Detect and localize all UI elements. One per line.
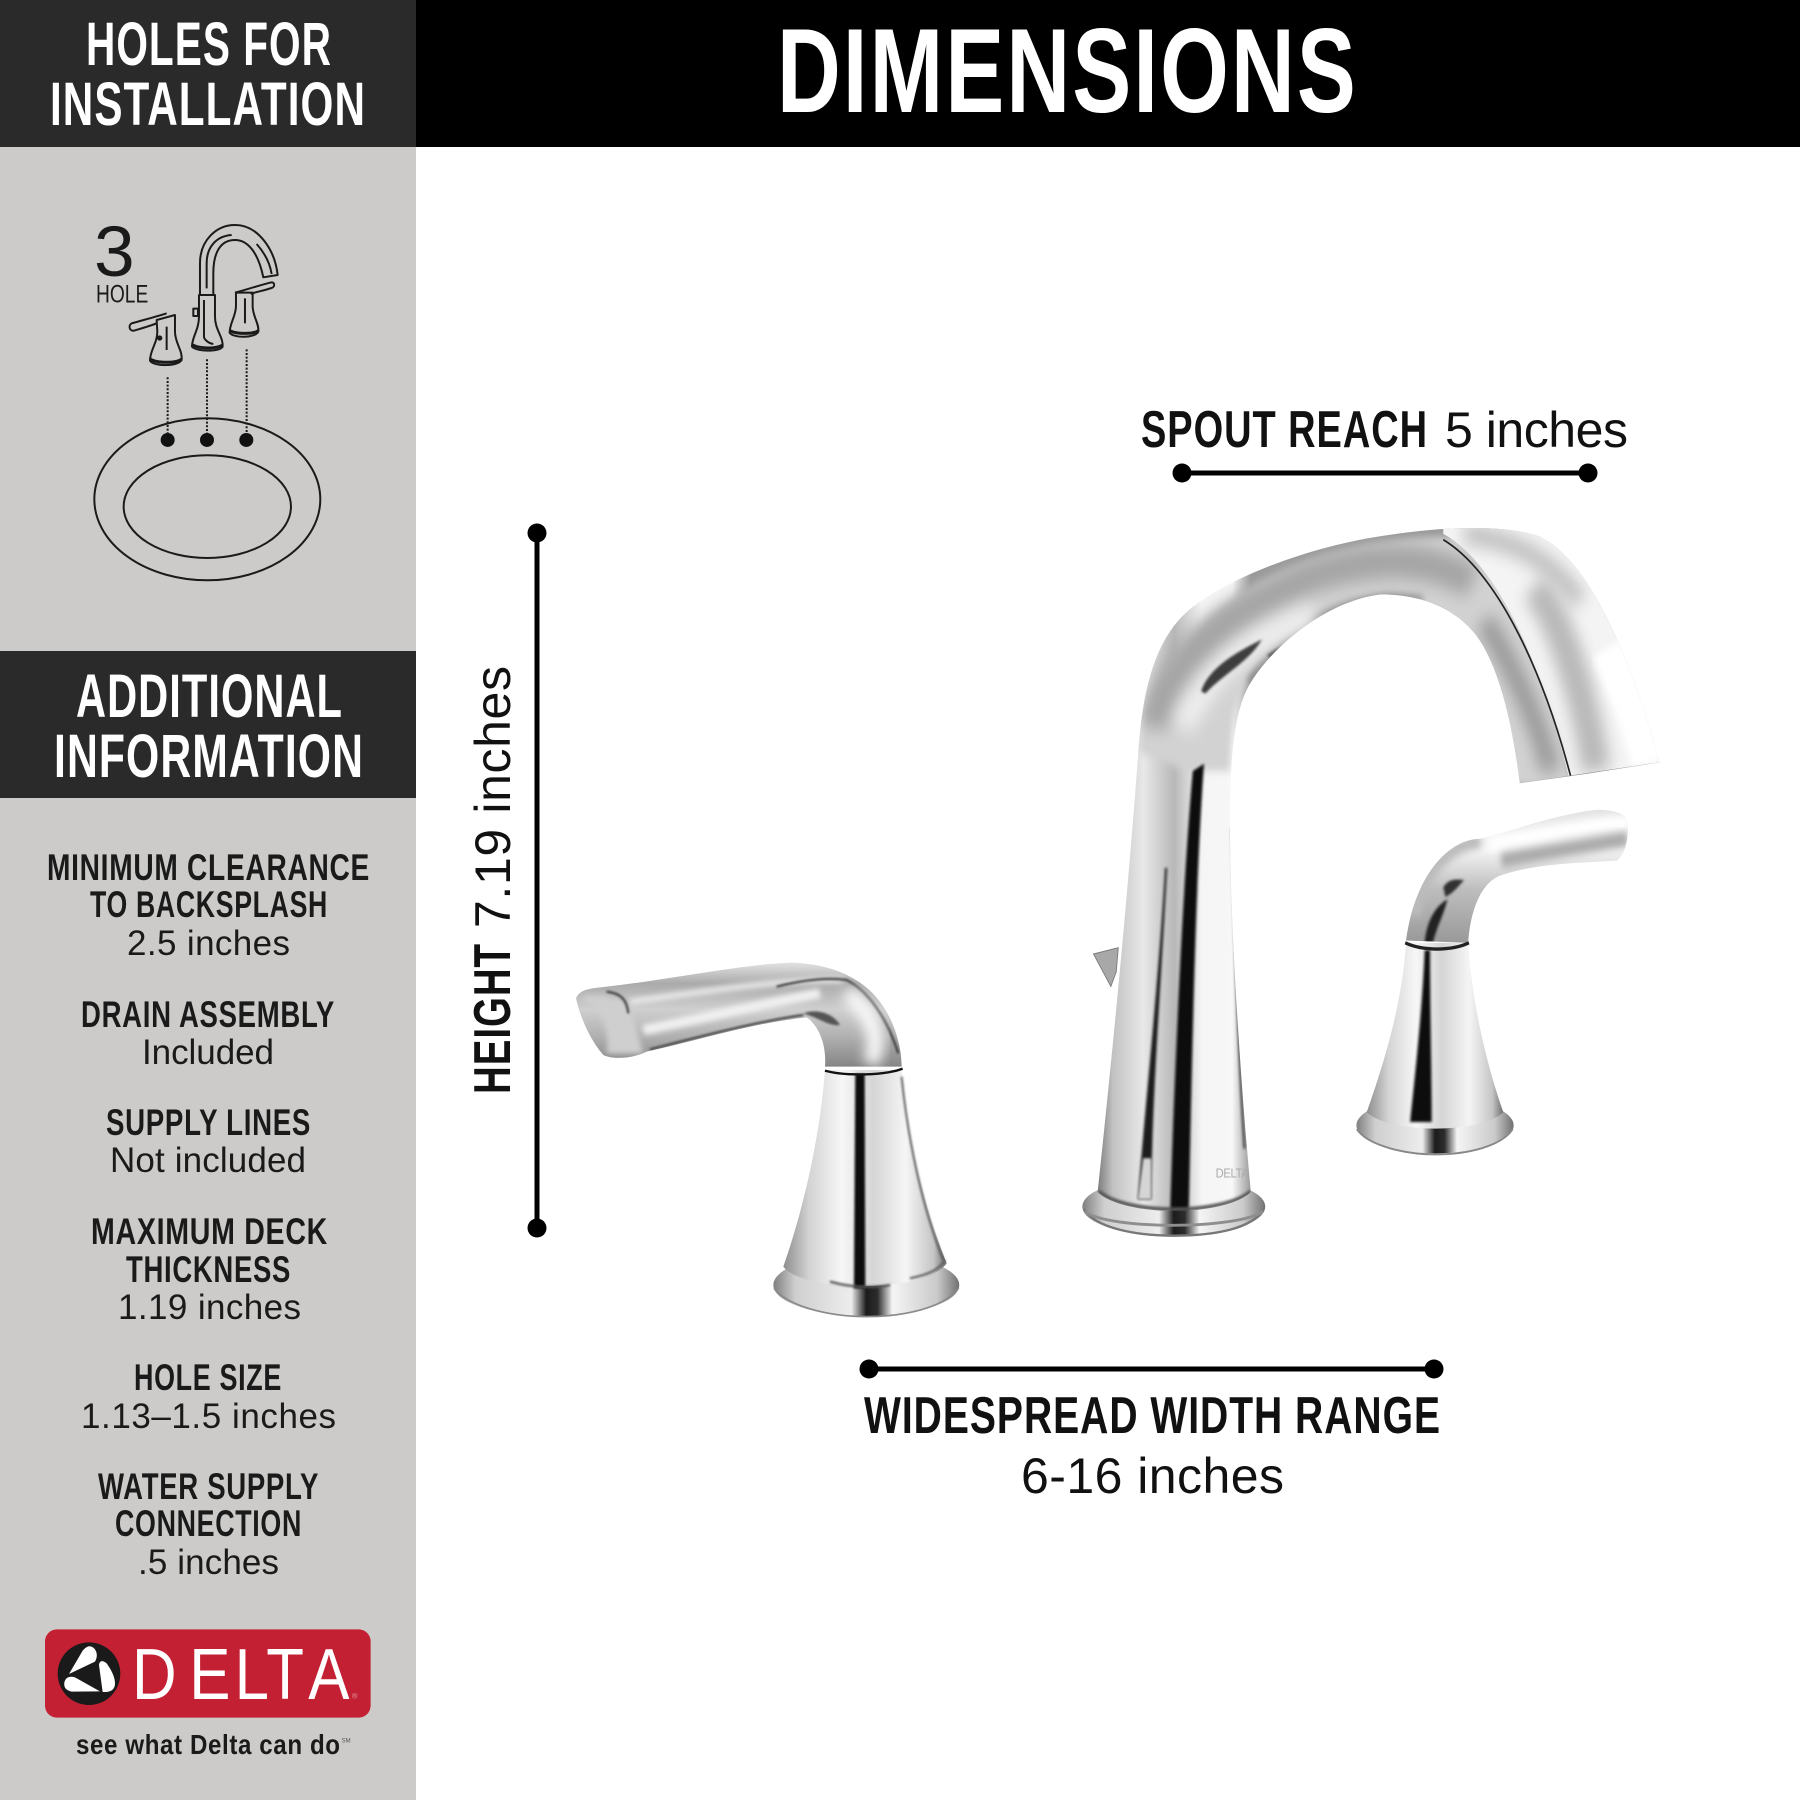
logo wordmark: DELTA [132, 1634, 349, 1715]
spout base flange [1082, 1177, 1265, 1237]
title: dimensions: DIMENSIONS [777, 4, 1358, 138]
service mark: SM [342, 1739, 351, 1745]
spec: supply lines: Not included [110, 1141, 306, 1180]
pop-up drain knob [1093, 948, 1118, 986]
dimension: height: 7.19 inches [465, 666, 521, 928]
spec: supply lines [106, 1102, 311, 1180]
heading: holes for installation: INSTALLATION [50, 70, 366, 138]
left handle flange [773, 1254, 959, 1317]
icon label: 3 hole: HOLE [96, 281, 148, 308]
spec: maximum deck thickness [91, 1211, 328, 1327]
dimension: spout reach [1141, 401, 1628, 482]
spec: minimum clearance: TO BACKSPLASH [90, 884, 328, 925]
icon: dotted guide lines [168, 349, 247, 433]
spec: maximum deck thickness: THICKNESS [126, 1249, 291, 1290]
left handle lever [576, 963, 903, 1074]
spec: supply lines: SUPPLY LINES [106, 1102, 311, 1143]
product: chrome center spout [1082, 519, 1667, 1237]
spec: maximum deck thickness: MAXIMUM DECK [91, 1211, 328, 1252]
icon label: 3 hole [94, 212, 148, 308]
dimension: widespread width range: WIDESPREAD WIDTH RANGE [864, 1387, 1441, 1445]
dimension: spout reach: 5 inches [1445, 402, 1628, 458]
dimension: height: HEIGHT [464, 943, 522, 1094]
dimension: widespread width range [860, 1360, 1444, 1504]
product: left handle [576, 963, 959, 1317]
text block: additional specifications [47, 847, 370, 1582]
heading: additional information: ADDITIONAL [76, 662, 343, 730]
heading: holes for installation: HOLES FOR [86, 10, 332, 78]
right handle [1356, 810, 1630, 1154]
tagline: see what Delta can do [76, 1729, 341, 1760]
spec: hole size: 1.13–1.5 inches [81, 1397, 336, 1436]
spec: water supply connection [98, 1466, 319, 1582]
icon label: 3 hole: 3 [94, 212, 135, 292]
spec: maximum deck thickness: 1.19 inches [118, 1288, 301, 1327]
dimension: height [464, 524, 546, 1238]
spec: water supply connection: CONNECTION [115, 1503, 302, 1544]
logo badge [45, 1629, 371, 1718]
spec: water supply connection: WATER SUPPLY [98, 1466, 319, 1507]
title: dimensions [416, 0, 1800, 147]
spec: water supply connection: .5 inches [138, 1543, 279, 1582]
icon: spout line drawing [130, 225, 278, 365]
spec: minimum clearance: MINIMUM CLEARANCE [47, 847, 370, 888]
left handle cone [783, 1070, 947, 1288]
logo: delta [45, 1629, 371, 1760]
icon: basin outline [94, 418, 320, 580]
spout body [1087, 519, 1667, 1221]
registered mark: ® [352, 1692, 358, 1701]
panel: left sidebar background [0, 0, 416, 1800]
spec: hole size [81, 1357, 336, 1436]
spec: drain assembly: Included [142, 1033, 274, 1072]
spec: minimum clearance: 2.5 inches [127, 924, 290, 963]
heading: holes for installation [0, 0, 416, 147]
icon: three hole faucet over basin [94, 212, 320, 580]
logo mark [58, 1642, 120, 1705]
heading: additional information [0, 651, 416, 798]
spec: hole size: HOLE SIZE [134, 1357, 282, 1398]
heading: additional information: INFORMATION [54, 722, 364, 790]
dimension: spout reach: SPOUT REACH [1141, 401, 1428, 459]
spec: minimum clearance [47, 847, 370, 963]
icon: mounting holes [161, 433, 253, 447]
dimension: widespread width range: 6-16 inches [1021, 1448, 1284, 1504]
spec: drain assembly [81, 994, 335, 1072]
logo etched on spout: DELTA [1216, 1166, 1250, 1181]
spec: drain assembly: DRAIN ASSEMBLY [81, 994, 335, 1035]
